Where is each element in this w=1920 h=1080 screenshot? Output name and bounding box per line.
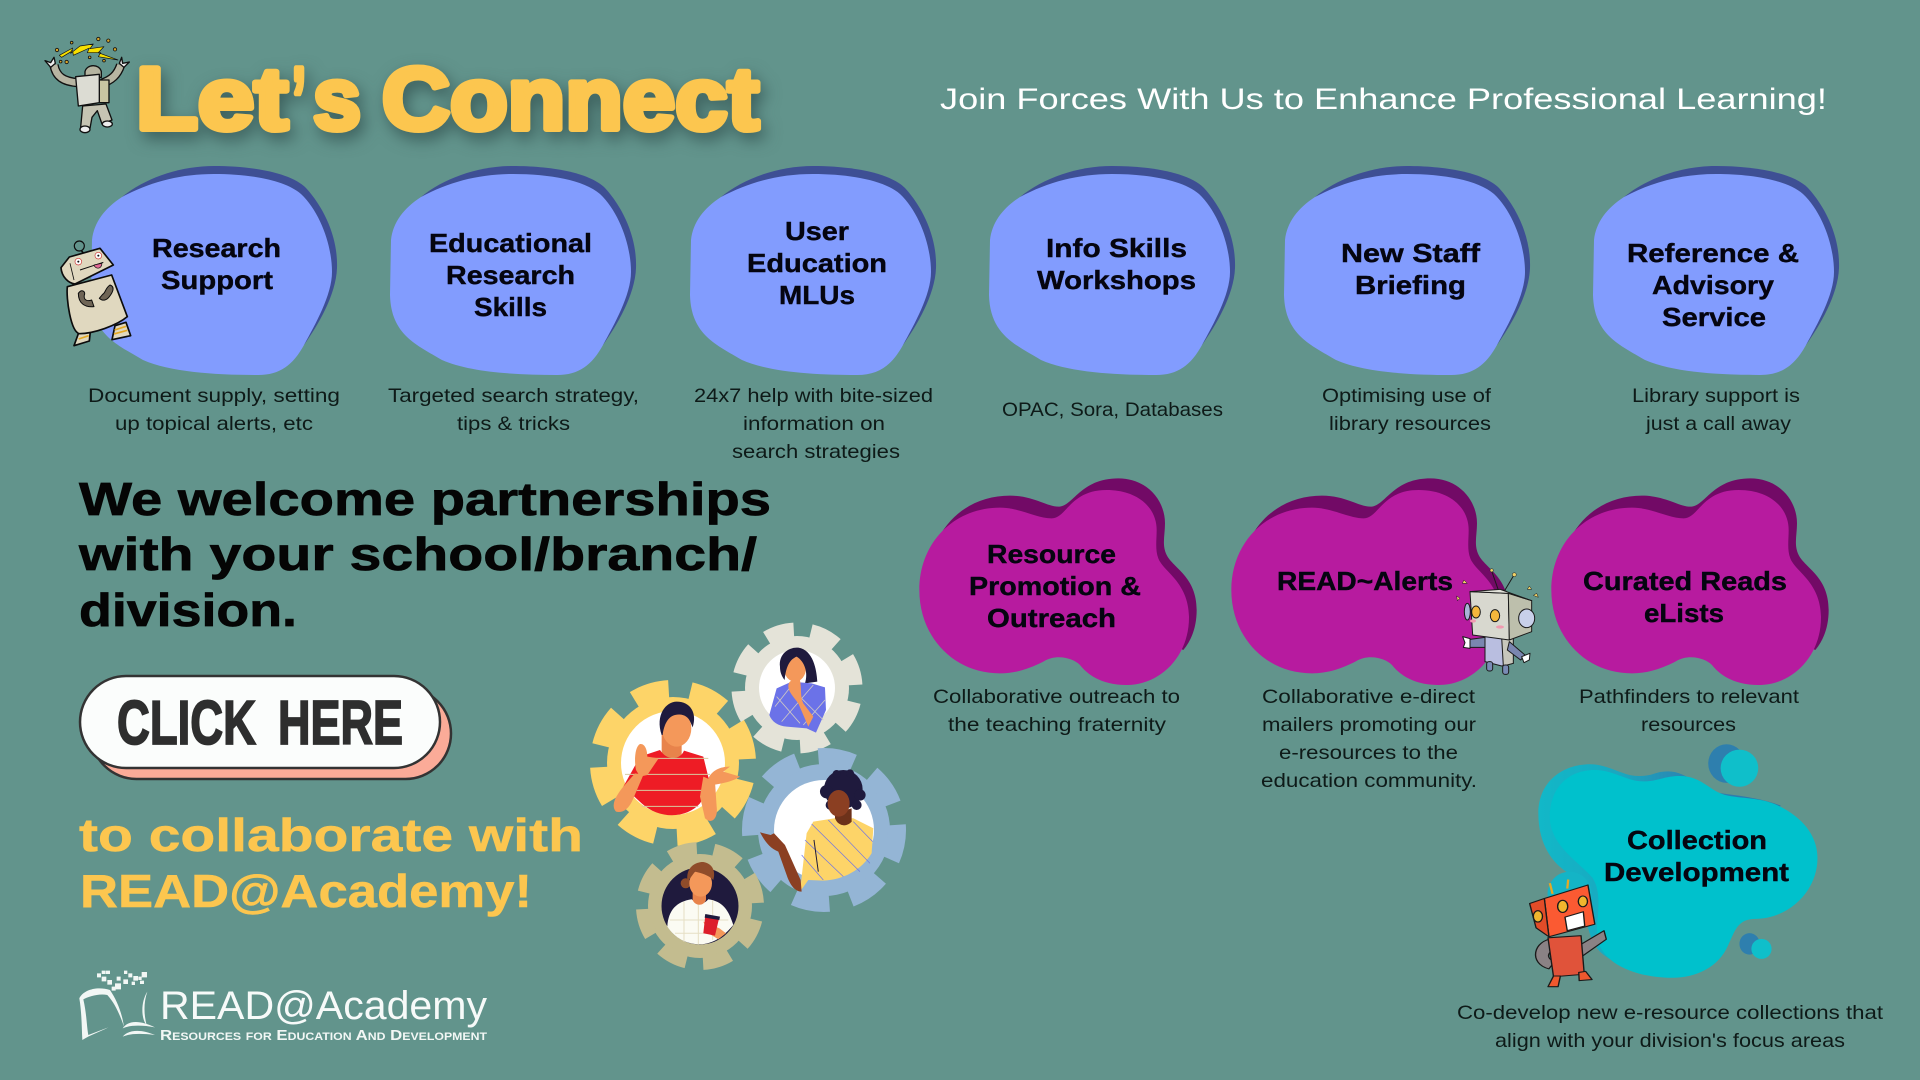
heading: Research <box>446 260 575 290</box>
panel: user education MLUs <box>690 166 936 463</box>
panel: research support <box>88 166 340 435</box>
description <box>88 385 340 435</box>
panel: resource promotion and outreach <box>919 478 1197 736</box>
description: the teaching fraternity <box>948 714 1166 736</box>
description <box>388 385 639 435</box>
description: Targeted search strategy, <box>388 385 639 407</box>
blob <box>1551 478 1829 685</box>
blob <box>919 478 1197 685</box>
title: Let <box>136 49 288 148</box>
description: Collaborative outreach to <box>933 686 1180 708</box>
description <box>1322 385 1492 435</box>
heading: Service <box>1662 302 1766 332</box>
collaborate call to action <box>79 809 583 917</box>
description: 24x7 help with bite-sized <box>694 385 933 407</box>
gear: person with curly hair <box>721 727 927 933</box>
click here button <box>80 676 451 779</box>
blob <box>390 166 636 375</box>
icon: red pointing robot <box>1530 880 1606 987</box>
description: mailers promoting our <box>1262 714 1477 736</box>
gears with people <box>571 608 927 984</box>
panel: info skills workshops <box>989 166 1235 421</box>
gear: woman with coffee cup <box>622 828 778 984</box>
blob <box>91 166 337 375</box>
heading: Curated Reads <box>1583 566 1787 596</box>
description: information on <box>743 413 885 435</box>
heading <box>747 216 887 310</box>
panel: reference and advisory service <box>1593 166 1839 435</box>
description: Co-develop new e-resource collections that <box>1457 1002 1884 1024</box>
heading: Advisory <box>1652 270 1775 300</box>
heading: READ~Alerts <box>1277 566 1453 596</box>
heading: Educational <box>429 228 592 258</box>
heading <box>152 233 281 295</box>
heading: eLists <box>1644 598 1724 628</box>
click here button: HERE <box>278 689 403 758</box>
description: Collaborative e-direct <box>1262 686 1476 708</box>
heading: Reference & <box>1627 238 1799 268</box>
title: Connect <box>382 49 759 148</box>
description: search strategies <box>732 441 900 463</box>
heading <box>969 539 1141 633</box>
panel: READ alerts <box>1231 478 1509 792</box>
description <box>1261 686 1477 792</box>
heading <box>429 228 592 322</box>
description <box>933 686 1180 736</box>
heading: Outreach <box>987 603 1116 633</box>
title: s <box>313 49 361 148</box>
panel: new staff briefing <box>1284 166 1530 435</box>
blob <box>1593 166 1839 375</box>
description: library resources <box>1329 413 1491 435</box>
collaborate call to action: READ@Academy! <box>80 865 532 917</box>
heading <box>1341 238 1480 300</box>
description <box>1457 1002 1884 1052</box>
heading <box>1037 233 1196 295</box>
collaborate call to action: to collaborate with <box>79 809 583 861</box>
heading <box>1627 238 1799 332</box>
description: tips & tricks <box>457 413 570 435</box>
description: e-resources to the <box>1279 742 1458 764</box>
partnership heading: division. <box>79 584 297 636</box>
logo: READ@Academy <box>79 971 487 1044</box>
blob <box>1284 166 1530 375</box>
description <box>1579 686 1800 736</box>
heading: Workshops <box>1037 265 1196 295</box>
description: OPAC, Sora, Databases <box>1002 399 1223 421</box>
blob <box>989 166 1235 375</box>
description: Pathfinders to relevant <box>1579 686 1800 708</box>
wordmark: READ@Academy <box>160 984 487 1028</box>
description: align with your division's focus areas <box>1495 1030 1845 1052</box>
gear: man in red shirt <box>571 661 775 865</box>
heading: Development <box>1604 857 1789 887</box>
description: education community. <box>1261 770 1477 792</box>
partnership heading: with your school/branch/ <box>78 528 757 580</box>
description: just a call away <box>1645 413 1791 435</box>
heading: Promotion & <box>969 571 1141 601</box>
description <box>1632 385 1800 435</box>
description: resources <box>1641 714 1736 736</box>
panel: curated reads elists <box>1551 478 1829 736</box>
description: up topical alerts, etc <box>115 413 313 435</box>
heading: Skills <box>474 292 547 322</box>
heading: Collection <box>1627 825 1767 855</box>
partnership heading: We welcome partnerships <box>79 473 771 525</box>
title <box>136 49 759 148</box>
blob <box>1538 744 1817 978</box>
heading: Education <box>747 248 887 278</box>
heading: MLUs <box>779 280 855 310</box>
blob <box>1231 478 1509 685</box>
description <box>694 385 933 463</box>
gear: woman in blue sweater <box>717 608 877 768</box>
heading: Research <box>152 233 281 263</box>
click here button: CLICK <box>117 689 256 758</box>
description: Library support is <box>1632 385 1800 407</box>
heading: Resource <box>987 539 1116 569</box>
panel: educational research skills <box>388 166 639 435</box>
heading <box>1604 825 1789 887</box>
heading: New Staff <box>1341 238 1480 268</box>
icon: open book with pixels <box>79 971 155 1040</box>
blob <box>690 166 936 375</box>
description: Optimising use of <box>1322 385 1492 407</box>
icon: grey antenna robot <box>1457 569 1538 674</box>
panel: collection development <box>1457 744 1884 1052</box>
heading: User <box>785 216 849 246</box>
subtitle: Join Forces With Us to Enhance Professional Learning! <box>940 83 1827 116</box>
icon: beige robot <box>61 241 131 346</box>
title: ’ <box>292 49 306 148</box>
tagline: Resources for Education And Development <box>160 1027 487 1044</box>
heading: Support <box>161 265 273 295</box>
heading <box>1583 566 1787 628</box>
heading: Briefing <box>1355 270 1466 300</box>
description: Document supply, setting <box>88 385 340 407</box>
partnership heading <box>78 473 771 636</box>
heading: Info Skills <box>1046 233 1187 263</box>
icon: robot juggling lightning <box>45 37 129 133</box>
